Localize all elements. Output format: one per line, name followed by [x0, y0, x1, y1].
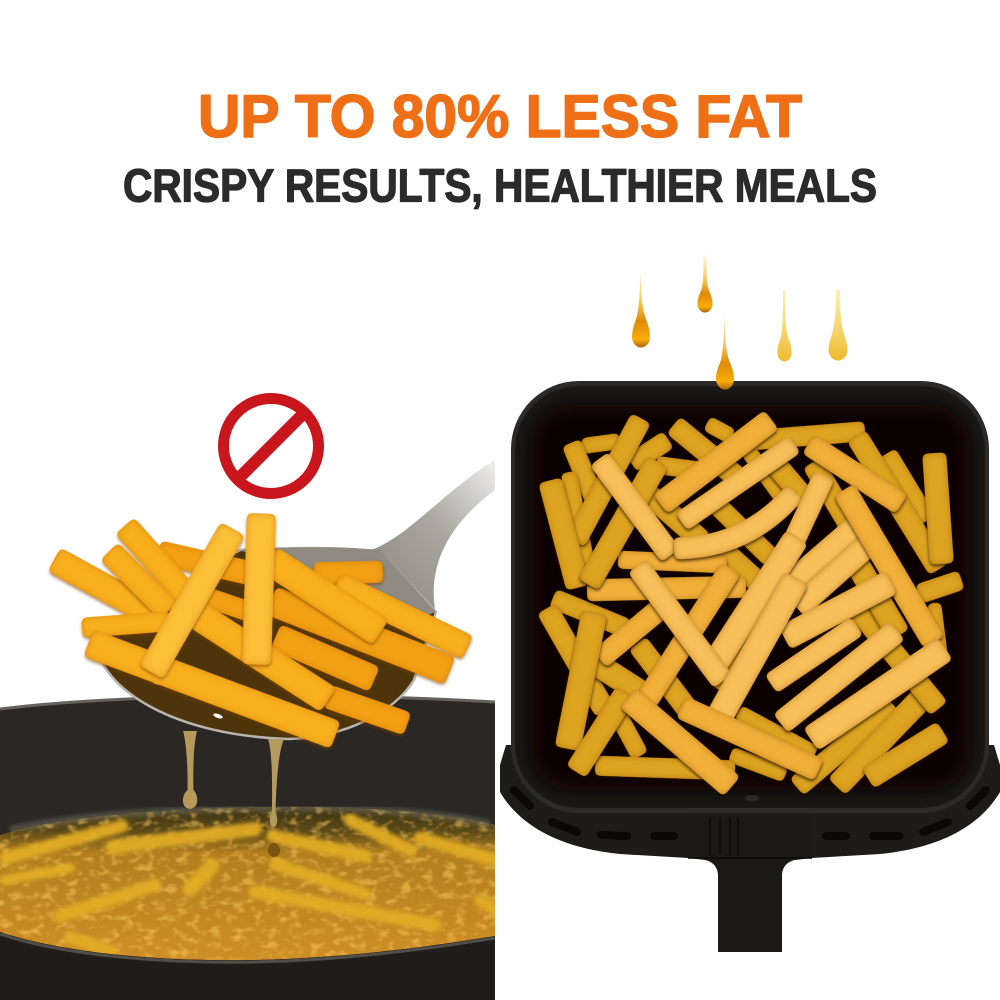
oil drop 1 [632, 265, 650, 348]
basket inner wall [515, 386, 985, 808]
slotted spoon bowl [95, 548, 436, 739]
spoon rim metal [240, 547, 436, 614]
panel: air fryer basket [500, 381, 1000, 952]
oil drop 3 [716, 308, 734, 390]
basket vent slots [514, 790, 986, 836]
subtitle: CRISPY RESULTS, HEALTHIER MEALS [123, 160, 877, 212]
spoon handle [370, 460, 495, 615]
frying pot [0, 699, 495, 960]
oil drips from spoon [183, 731, 284, 857]
basket bottom clip detail [745, 795, 759, 801]
handle seams [688, 818, 812, 858]
air fried fries [552, 427, 952, 780]
basket outer wall [511, 381, 989, 813]
icon: prohibition sign [224, 398, 318, 494]
oil drop 5 [828, 290, 848, 360]
oil drop 4 [778, 290, 792, 362]
basket inner floor [530, 405, 970, 790]
pot front rim [0, 932, 495, 1000]
basket side band [500, 745, 1000, 858]
pot front rim edge [0, 934, 495, 962]
hot oil with fries [0, 806, 495, 960]
oil drops above basket [632, 254, 848, 390]
fries on spoon [66, 528, 456, 730]
oil drop 2 [698, 254, 713, 312]
panel: deep frying [0, 460, 495, 1000]
spoon holes [152, 682, 223, 718]
title: UP TO 80% LESS FAT [198, 83, 802, 150]
basket handle [688, 815, 812, 952]
pot top rim [0, 696, 495, 709]
